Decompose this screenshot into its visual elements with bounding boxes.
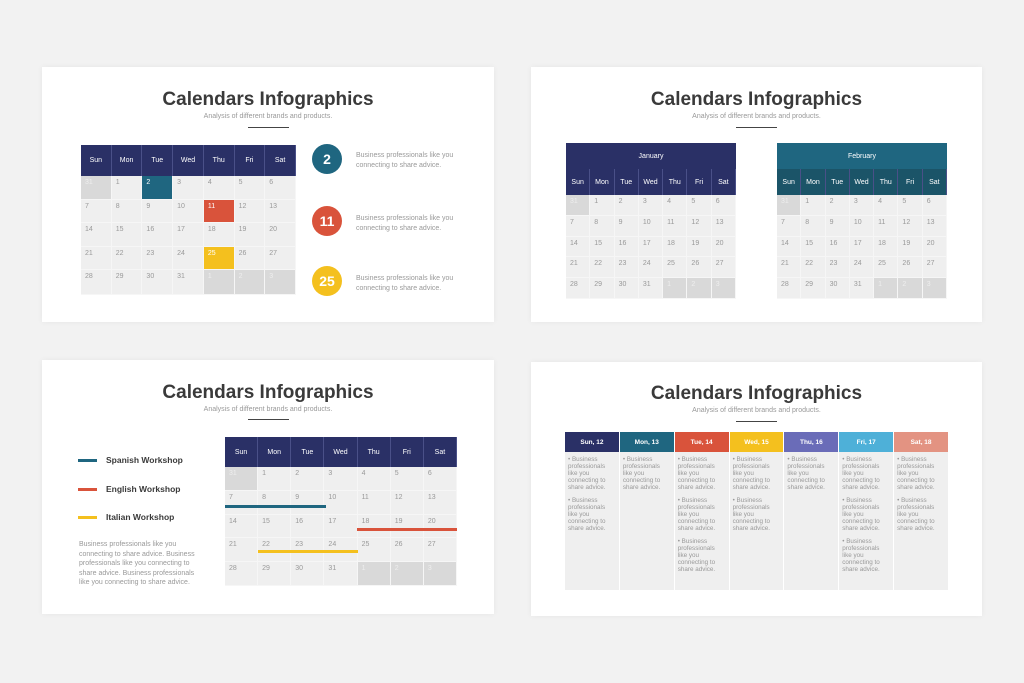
January calendar: 20	[716, 240, 724, 247]
January calendar: 11	[667, 219, 674, 226]
week table: • Business professionals like you connecting to share advice.	[842, 538, 880, 573]
February calendar: Sun	[782, 178, 795, 186]
calendar: 3	[428, 565, 432, 572]
February calendar: 6	[927, 198, 931, 205]
legend: Spanish: Spanish Workshop	[106, 455, 183, 465]
January calendar: 29	[594, 281, 602, 288]
calendar: 13	[269, 202, 277, 210]
calendar: 29	[116, 273, 124, 280]
icon: circle 11: 11	[320, 213, 334, 229]
paragraph: Business professionals like you connecting to share advice. Business professionals like you connecting to share advice. Business professionals like you connecting to share advice.	[79, 541, 195, 586]
January calendar: 12	[691, 219, 699, 226]
icon: circle 11	[312, 206, 342, 236]
legend: Italian: Italian Workshop	[106, 512, 174, 522]
February calendar: 17	[854, 240, 862, 247]
February calendar: 24	[854, 260, 862, 267]
February calendar: 31	[854, 281, 862, 288]
calendar: 6	[428, 470, 432, 477]
calendar: 18	[208, 226, 216, 233]
January calendar: 6	[716, 198, 720, 205]
calendar: 31	[328, 565, 336, 572]
calendar: Mon	[120, 157, 133, 164]
February calendar: 28	[781, 281, 789, 288]
week table: • Business professionals like you connecting to share advice.	[568, 456, 605, 491]
January header: January	[639, 152, 663, 160]
calendar: 2	[295, 470, 299, 477]
calendar: 3	[269, 273, 273, 280]
week table: • Business professionals like you connecting to share advice.	[678, 538, 715, 573]
calendar: 6	[269, 179, 273, 186]
calendar: 5	[239, 179, 242, 186]
January calendar: 2	[619, 198, 622, 205]
February calendar: 29	[805, 281, 813, 288]
icon: circle 2	[312, 144, 342, 174]
icon: circle 2: 2	[323, 151, 331, 167]
text block 1: connecting to share advice.	[356, 162, 441, 168]
January calendar: 31	[570, 198, 578, 205]
text block 1: Business professionals like you	[356, 152, 453, 159]
January calendar: 17	[643, 240, 651, 247]
calendar: Sun	[90, 157, 102, 164]
calendar: 19	[239, 226, 246, 233]
calendar: 11	[208, 202, 215, 210]
week table: Thu, 16	[800, 438, 823, 446]
week table: • Business professionals like you connecting to share advice.	[787, 456, 825, 491]
calendar: 10	[177, 202, 185, 210]
subtitle: Analysis of different brands and products.	[692, 407, 821, 414]
February calendar: 19	[902, 240, 910, 247]
calendar: Fri	[245, 157, 254, 164]
February calendar: 5	[902, 198, 906, 205]
calendar: 28	[229, 565, 237, 572]
calendar: 1	[116, 179, 120, 186]
January calendar	[566, 169, 736, 299]
calendar: 21	[229, 541, 237, 548]
calendar: 26	[239, 250, 246, 256]
week table: • Business professionals like you connecting to share advice.	[897, 497, 935, 532]
February calendar: 8	[805, 219, 809, 226]
calendar: 25	[362, 541, 369, 548]
February calendar: 20	[927, 240, 934, 247]
calendar: 16	[295, 518, 303, 525]
February calendar: 4	[878, 198, 882, 205]
January calendar: Sun	[571, 178, 584, 186]
January calendar: 16	[619, 240, 626, 247]
calendar: 30	[295, 565, 303, 572]
calendar: 9	[295, 494, 299, 501]
January calendar: Fri	[695, 178, 703, 186]
calendar: Tue	[151, 157, 163, 164]
calendar: Sat	[275, 157, 285, 164]
February calendar: 23	[830, 260, 837, 267]
January calendar: 5	[691, 198, 695, 205]
January calendar: 25	[667, 260, 675, 267]
text block 3: Business professionals like you	[356, 275, 453, 282]
February calendar: 7	[781, 219, 785, 226]
week table: Fri, 17	[857, 438, 876, 446]
January calendar: 3	[643, 198, 647, 205]
calendar: 18	[362, 518, 369, 525]
February calendar: Wed	[854, 178, 869, 186]
February calendar: 14	[781, 240, 789, 247]
calendar: 7	[85, 202, 89, 210]
January calendar: Sat	[718, 178, 729, 186]
calendar: 24	[177, 250, 185, 256]
January calendar: Wed	[643, 178, 658, 186]
week table: • Business professionals like you connecting to share advice.	[733, 497, 770, 532]
calendar: 2	[395, 565, 399, 572]
February calendar: Tue	[831, 178, 843, 186]
February calendar: 26	[902, 260, 910, 267]
February calendar: 3	[927, 281, 931, 288]
calendar: 4	[208, 179, 212, 186]
calendar: 8	[116, 202, 120, 210]
calendar: 31	[85, 179, 93, 186]
February calendar: 25	[878, 260, 886, 267]
February calendar: 1	[805, 198, 809, 205]
February calendar: 22	[805, 260, 813, 267]
icon: circle 25	[312, 266, 342, 296]
calendar: 29	[262, 565, 270, 572]
calendar: 20	[428, 518, 436, 525]
week table: • Business professionals like you connecting to share advice.	[568, 497, 605, 532]
text block 2: connecting to share advice.	[356, 224, 441, 232]
January calendar: 27	[716, 260, 724, 267]
calendar: 9	[146, 202, 150, 210]
calendar: 22	[262, 541, 270, 548]
February calendar: 16	[830, 240, 837, 247]
January calendar: 10	[643, 219, 651, 226]
calendar: 16	[146, 226, 154, 233]
title: Calendars Infographics	[651, 383, 862, 404]
panel: single month calendar	[42, 67, 494, 322]
calendar: 17	[328, 518, 336, 525]
February header	[777, 143, 947, 169]
week table	[565, 432, 948, 590]
February calendar: Fri	[906, 178, 914, 186]
January calendar: 23	[619, 260, 626, 267]
calendar: Fri	[403, 448, 411, 456]
January calendar: 21	[570, 260, 578, 267]
calendar: Tue	[301, 448, 313, 456]
calendar: Sat	[435, 448, 445, 456]
text block 1	[356, 152, 453, 168]
February calendar: 31	[781, 198, 789, 205]
week table: • Business professionals like you connecting to share advice.	[733, 456, 770, 491]
subtitle: Analysis of different brands and products.	[204, 406, 332, 413]
subtitle: Analysis of different brands and products.	[692, 113, 821, 120]
February calendar: 2	[830, 198, 833, 205]
week table: • Business professionals like you connecting to share advice.	[842, 497, 880, 532]
calendar: 28	[85, 273, 93, 280]
calendar: 5	[395, 470, 399, 477]
week table: Sat, 18	[911, 438, 932, 446]
week table: • Business professionals like you connecting to share advice.	[897, 456, 935, 491]
calendar: 31	[177, 273, 185, 280]
calendar: 23	[146, 250, 154, 256]
calendar: 1	[262, 470, 266, 477]
calendar: 3	[328, 470, 332, 477]
February calendar: 13	[927, 219, 934, 226]
January calendar: Thu	[669, 178, 681, 186]
calendar: 11	[362, 494, 369, 501]
January calendar: 4	[667, 198, 671, 205]
January calendar: 1	[594, 198, 598, 205]
bar: Spanish	[225, 505, 326, 508]
calendar: 15	[116, 226, 124, 233]
calendar	[225, 437, 457, 586]
week table: • Business professionals like you connecting to share advice.	[623, 456, 660, 491]
calendar: 24	[328, 541, 336, 548]
January calendar: 7	[570, 219, 574, 226]
February calendar	[777, 169, 947, 299]
calendar: 26	[395, 541, 402, 548]
week table: • Business professionals like you connecting to share advice.	[678, 497, 715, 532]
calendar: 20	[269, 226, 277, 233]
January calendar: 9	[619, 219, 622, 226]
calendar: 22	[116, 250, 124, 256]
title: Calendars Infographics	[162, 89, 374, 110]
calendar: 4	[362, 470, 365, 477]
calendar: 12	[395, 494, 402, 501]
calendar: 1	[362, 565, 365, 572]
subtitle: Analysis of different brands and products.	[204, 113, 332, 120]
calendar: 21	[85, 250, 93, 256]
January calendar: 3	[716, 281, 720, 288]
panel: weekly schedule	[531, 362, 982, 616]
icon: circle 25: 25	[319, 273, 335, 289]
January calendar: 31	[643, 281, 651, 288]
calendar: 17	[177, 226, 185, 233]
calendar: 19	[395, 518, 402, 525]
February calendar: Mon	[806, 178, 820, 186]
calendar: 12	[239, 202, 246, 210]
January calendar: 14	[570, 240, 578, 247]
calendar: 15	[262, 518, 270, 525]
January calendar: 1	[667, 281, 671, 288]
week table: Sun, 12	[580, 438, 603, 446]
February calendar: 3	[854, 198, 858, 205]
January calendar: 19	[691, 240, 699, 247]
calendar: 3	[177, 179, 181, 186]
calendar: 1	[208, 273, 212, 280]
February calendar: 21	[781, 260, 789, 267]
January calendar: 8	[594, 219, 598, 226]
January calendar: 24	[643, 260, 651, 267]
January calendar: 2	[691, 281, 695, 288]
January calendar: 13	[716, 219, 724, 226]
calendar: 8	[262, 494, 266, 501]
week table: Tue, 14	[691, 438, 713, 446]
panel: two month calendars	[531, 67, 982, 322]
February calendar: 2	[902, 281, 906, 288]
title: Calendars Infographics	[162, 382, 374, 403]
January calendar: Tue	[620, 178, 632, 186]
calendar: 10	[328, 494, 336, 501]
calendar: 7	[229, 494, 233, 501]
text block 3: connecting to share advice.	[356, 284, 441, 292]
week table: Mon, 13	[635, 438, 659, 446]
panel: workshop calendar	[42, 360, 494, 614]
calendar: 14	[85, 226, 93, 233]
January calendar: 22	[594, 260, 602, 267]
February calendar: 12	[902, 219, 910, 226]
bar: English	[357, 528, 457, 531]
January calendar: 30	[619, 281, 626, 288]
January calendar: 18	[667, 240, 675, 247]
January calendar: 26	[691, 260, 699, 267]
calendar	[81, 145, 296, 295]
February calendar: 1	[878, 281, 882, 288]
February calendar: 30	[830, 281, 837, 288]
calendar: 30	[146, 273, 154, 280]
calendar: Thu	[213, 157, 225, 164]
January header	[566, 143, 736, 169]
calendar: 13	[428, 494, 436, 501]
February calendar: 10	[854, 219, 862, 226]
calendar: 2	[146, 179, 150, 186]
calendar: 27	[269, 250, 277, 256]
calendar: 27	[428, 541, 436, 548]
calendar: Mon	[267, 448, 281, 456]
February calendar: 9	[830, 219, 833, 226]
February calendar: 11	[878, 219, 885, 226]
legend: English: English Workshop	[106, 484, 180, 494]
text block 2	[356, 214, 453, 232]
week table: • Business professionals like you connecting to share advice.	[678, 456, 715, 491]
calendar: Wed	[181, 157, 195, 164]
title: Calendars Infographics	[651, 89, 862, 110]
January calendar: 28	[570, 281, 578, 288]
February calendar: 18	[878, 240, 886, 247]
January calendar: 15	[594, 240, 602, 247]
calendar: 23	[295, 541, 303, 548]
calendar: Wed	[333, 448, 348, 456]
February header: February	[848, 152, 876, 160]
text block 3	[356, 274, 453, 292]
January calendar: Mon	[595, 178, 609, 186]
calendar: 25	[208, 250, 216, 256]
week table: • Business professionals like you connecting to share advice.	[842, 456, 880, 491]
February calendar: 15	[805, 240, 813, 247]
calendar: Thu	[368, 448, 380, 456]
calendar: Sun	[235, 448, 247, 456]
calendar: 31	[229, 470, 237, 477]
calendar: 2	[239, 273, 242, 280]
February calendar: Thu	[880, 178, 892, 186]
bar: Italian	[258, 550, 358, 553]
calendar: 14	[229, 518, 237, 525]
February calendar: Sat	[929, 178, 940, 186]
text block 2: Business professionals like you	[356, 215, 453, 222]
February calendar: 27	[927, 260, 934, 267]
week table: Wed, 15	[744, 438, 769, 446]
